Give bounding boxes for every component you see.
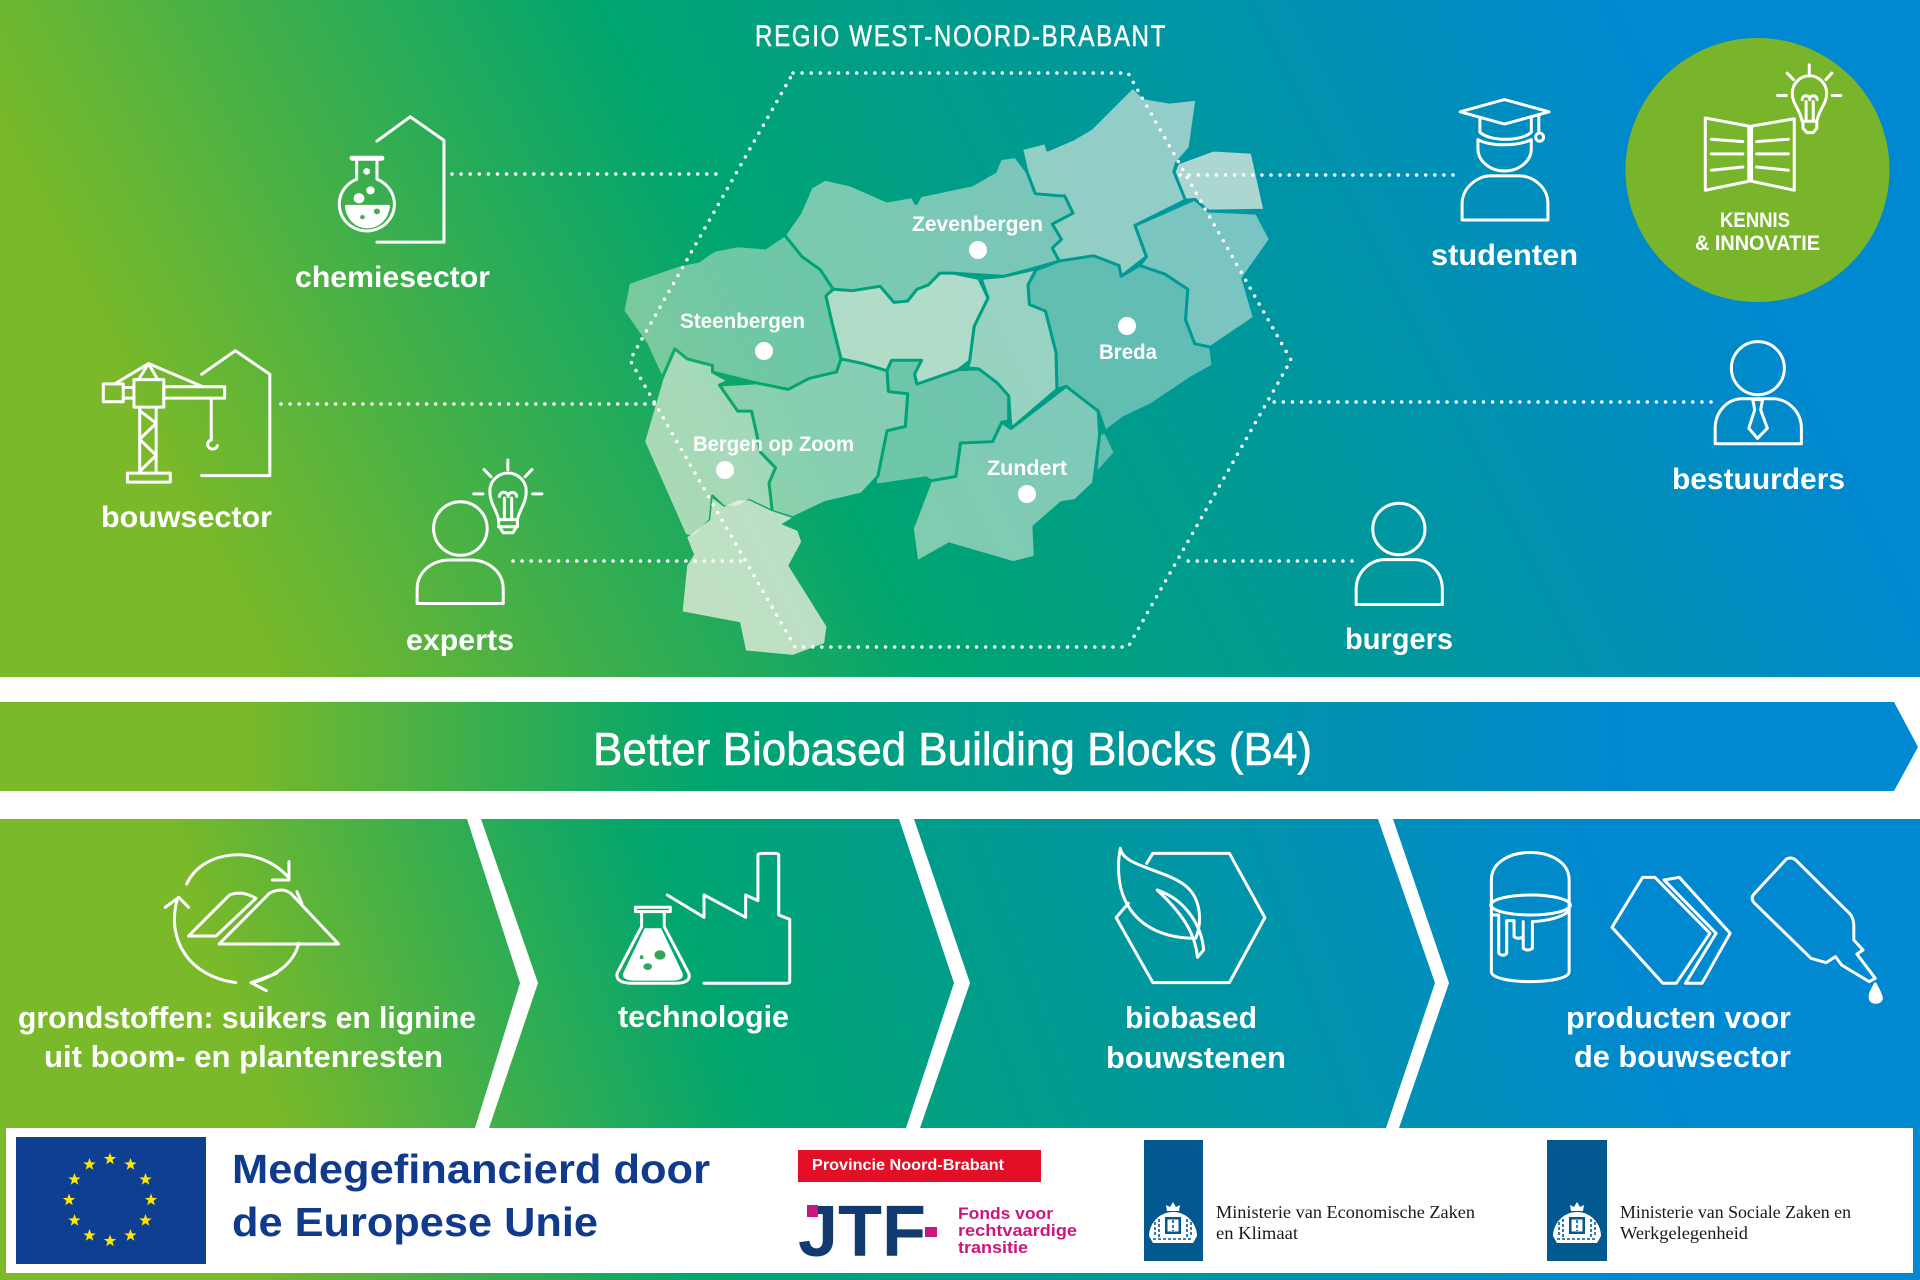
label: biobased bouwstenen [1106, 1000, 1286, 1075]
connector: chemiesector [452, 172, 724, 176]
map label: Zevenbergen [912, 213, 1043, 259]
icon: bestuurder with tie [1715, 342, 1801, 444]
map label: Steenbergen: Steenbergen [680, 310, 805, 333]
label: studenten: studenten [1431, 239, 1578, 272]
panel: funder logos [6, 1128, 1913, 1273]
banner arrow [0, 702, 1918, 791]
logo: JTF [798, 1192, 1077, 1272]
banner title: Better Biobased Building Blocks (B4) [593, 723, 1312, 775]
logo: Ministerie SZW: Werkgelegenheid [1620, 1223, 1748, 1243]
map label: Bergen op Zoom [693, 433, 854, 479]
label: burgers: burgers [1345, 623, 1453, 656]
map label: Breda [1099, 317, 1157, 364]
label: producten voor de bouwsector: de bouwsector [1574, 1039, 1791, 1074]
label: grondstoffen: uit boom- en plantenresten [44, 1039, 443, 1074]
logo: Ministerie EZK [1144, 1140, 1475, 1261]
label: technologie: technologie [618, 999, 789, 1034]
map label: Zundert [987, 457, 1067, 503]
label: biobased bouwstenen: bouwstenen [1106, 1040, 1286, 1075]
logo: JTF: JTF [798, 1192, 926, 1272]
top panel background [0, 0, 1920, 677]
map label: Bergen op Zoom: Bergen op Zoom [693, 433, 854, 456]
text: medegefinancierd: de Europese Unie [232, 1199, 598, 1245]
logo: Ministerie EZK: Ministerie van Economische Zaken [1216, 1202, 1475, 1222]
icon: student with graduation cap [1460, 100, 1549, 220]
icon: boards [1612, 877, 1730, 983]
connector: studenten [1178, 173, 1453, 177]
icon: grondstoffen recycling [165, 855, 339, 991]
logo: JTF: Fonds voor [958, 1204, 1053, 1223]
label: experts: experts [406, 624, 514, 657]
title: regio: REGIO WEST-NOORD-BRABANT [755, 20, 1167, 53]
logo: EU flag [16, 1137, 206, 1264]
map label: Zevenbergen: Zevenbergen [912, 213, 1043, 236]
logo: JTF: rechtvaardige [958, 1221, 1077, 1240]
map label: Steenbergen [680, 310, 805, 360]
label: producten voor de bouwsector: producten voor [1566, 1000, 1791, 1035]
connector: bouwsector [281, 402, 655, 406]
logo: Ministerie EZK: en Klimaat [1216, 1223, 1298, 1243]
label: producten voor de bouwsector [1566, 1000, 1791, 1074]
hexagon outline [630, 73, 1291, 647]
text: medegefinancierd: Medegefinancierd door [232, 1146, 710, 1192]
icon: biobased hexagon and leaf [1116, 848, 1265, 983]
text: medegefinancierd [232, 1146, 710, 1245]
label: grondstoffen: grondstoffen: suikers en lignine [18, 1000, 476, 1035]
icon: glue bottle [1752, 858, 1881, 1002]
icon: expert with light bulb [417, 460, 542, 604]
logo: Ministerie SZW [1547, 1140, 1851, 1261]
label: biobased bouwstenen: biobased [1125, 1000, 1257, 1035]
panel: kennis en innovatie [1626, 38, 1890, 302]
map label: Breda: Breda [1099, 341, 1157, 364]
logo: Provincie Noord-Brabant [798, 1150, 1041, 1182]
icon: open book and light bulb [1705, 65, 1841, 190]
label: chemiesector: chemiesector [295, 261, 490, 294]
icon: bouwsector crane and building [103, 351, 270, 482]
panel: kennis en innovatie: & INNOVATIE [1695, 232, 1820, 255]
logo: JTF: transitie [958, 1238, 1028, 1257]
map: regio West-Noord-Brabant [623, 87, 1270, 655]
label: grondstoffen [18, 1000, 476, 1074]
panel: kennis en innovatie: KENNIS [1720, 209, 1790, 232]
bottom gradient strip [0, 1128, 1920, 1280]
icon: paint bucket [1491, 852, 1570, 982]
label: bestuurders: bestuurders [1672, 463, 1845, 496]
connector: burgers [1183, 559, 1352, 563]
logo: Ministerie SZW: Ministerie van Sociale Zaken en [1620, 1202, 1851, 1222]
icon: burger person [1356, 503, 1442, 605]
chevron panels [0, 819, 1920, 1128]
label: bouwsector: bouwsector [101, 501, 272, 534]
map label: Zundert: Zundert [987, 457, 1067, 480]
logo: Provincie Noord-Brabant: Provincie Noord-Brabant [812, 1157, 1005, 1174]
icon: chemiesector flask and building [339, 117, 444, 242]
connector: bestuurders [1273, 400, 1711, 404]
connector: experts [513, 559, 747, 563]
icon: technologie flask and factory [617, 853, 790, 983]
